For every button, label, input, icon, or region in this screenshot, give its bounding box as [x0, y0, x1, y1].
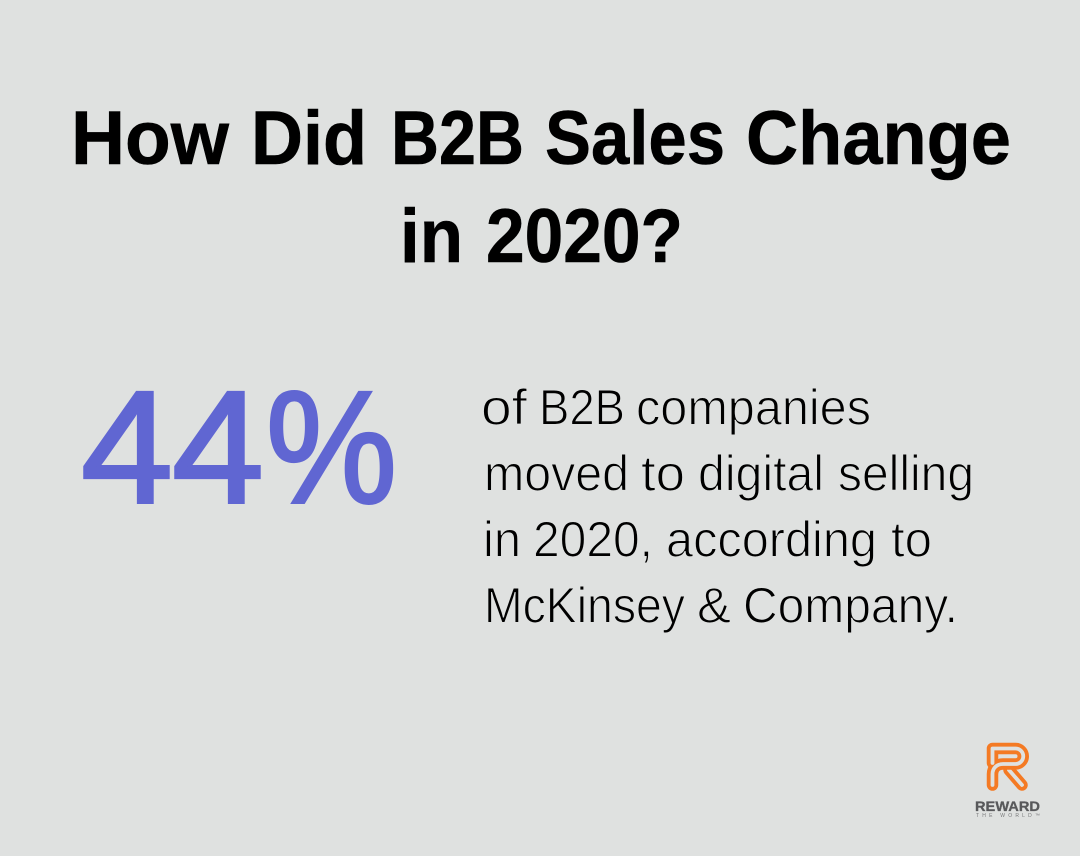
logo: Reward the World	[975, 748, 1040, 819]
description text: companies	[636, 380, 871, 436]
title: in	[400, 194, 463, 279]
big statistic: 44%: 4	[81, 358, 173, 536]
description text: to	[641, 446, 685, 502]
description text: to	[891, 512, 932, 568]
logo wordmark: REWARD	[975, 798, 1040, 814]
description text: of	[481, 380, 527, 436]
description text	[481, 380, 974, 634]
description text: in	[483, 512, 521, 568]
title: Change	[746, 96, 1011, 181]
icon: orange R mark	[992, 748, 1023, 785]
title: Did	[251, 96, 367, 181]
description text: according	[666, 512, 877, 568]
title: B2B	[391, 96, 524, 181]
big statistic: 44%	[81, 358, 397, 536]
description text: McKinsey	[484, 578, 685, 634]
title: Sales	[545, 96, 725, 181]
big statistic: 44%: 4	[172, 358, 264, 536]
description text: moved	[484, 446, 629, 502]
description text: selling	[838, 446, 974, 502]
description text: 2020,	[533, 512, 653, 568]
description text: Company.	[743, 578, 958, 634]
description text: &	[697, 578, 731, 634]
logo tagline: THE WORLD™	[976, 813, 1040, 819]
description text: digital	[698, 446, 824, 502]
title	[71, 96, 1011, 279]
title: 2020?	[486, 194, 683, 279]
big statistic: 44%: %	[266, 358, 397, 536]
description text: B2B	[539, 380, 625, 436]
title: How	[71, 96, 230, 181]
